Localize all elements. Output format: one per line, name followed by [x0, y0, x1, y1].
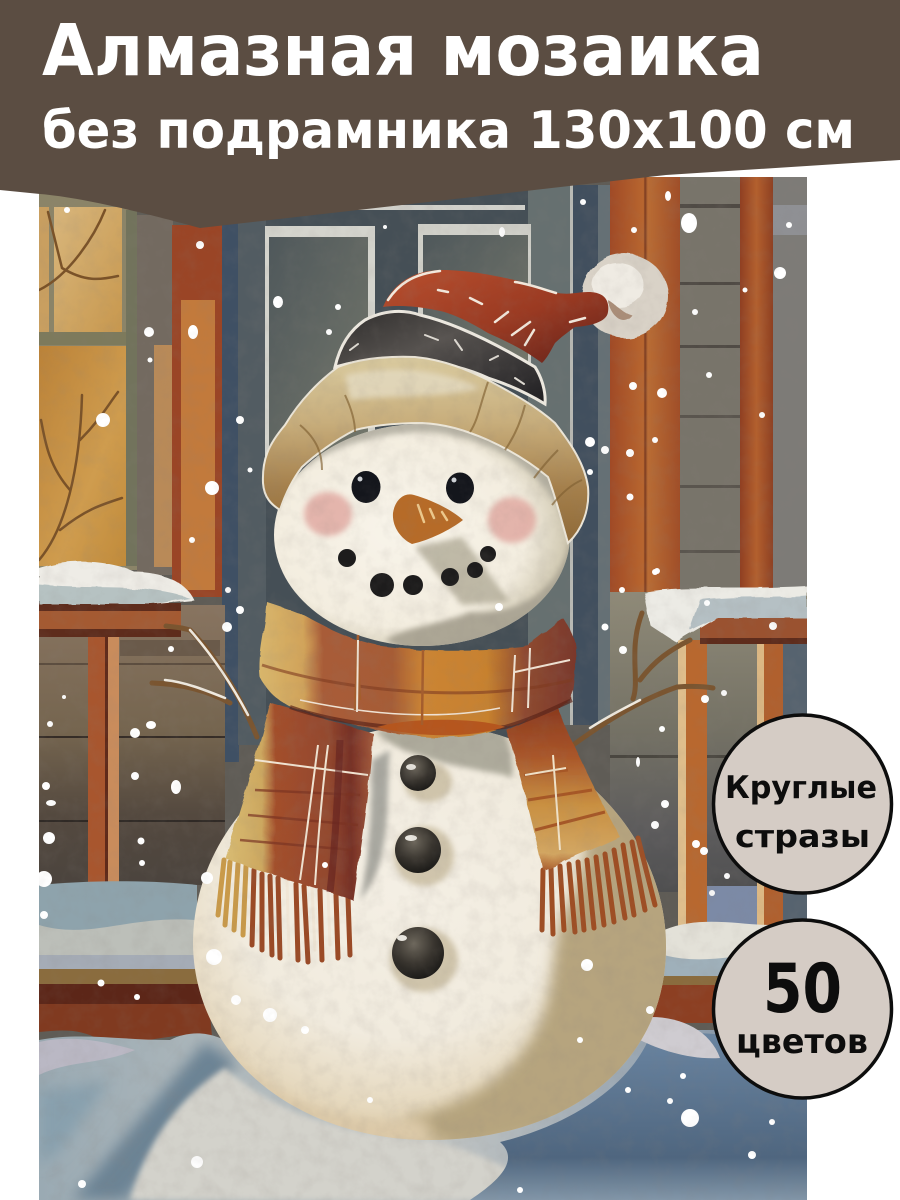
right tail plaid lines	[524, 755, 605, 850]
scarf right tail	[507, 707, 620, 870]
right scarf fringe	[542, 838, 655, 934]
watercolor paper texture	[39, 177, 807, 1200]
title: second line: без подрамника 130х100 см	[42, 101, 855, 161]
left tail plaid lines	[240, 740, 368, 892]
black hat band	[335, 311, 545, 404]
red santa hat	[383, 270, 608, 363]
snowman	[152, 254, 713, 1150]
band speckles	[350, 335, 524, 384]
snowman body	[193, 725, 666, 1140]
eye glints	[358, 476, 456, 482]
scarf left tail	[225, 703, 373, 900]
lower right wall with posts	[610, 592, 807, 930]
body shading	[232, 730, 666, 1140]
badge: round rhinestones	[714, 715, 892, 893]
scarf neck wrap	[259, 602, 576, 737]
buttons	[392, 755, 444, 979]
panel: watercolor snowman painting	[36, 177, 807, 1200]
badge: 50 colours	[714, 920, 892, 1098]
header banner	[0, 0, 900, 228]
background: building wall	[39, 177, 807, 1040]
brim knit marks	[300, 382, 582, 505]
badge: 50 colours: 50	[763, 950, 842, 1029]
neck plaid lines	[262, 635, 572, 735]
carrot nose	[393, 494, 463, 544]
badge: round rhinestones: Круглые	[725, 770, 877, 806]
nose highlights	[418, 505, 447, 522]
hat snow highlights	[388, 271, 585, 345]
bottom rail and drifts	[39, 881, 770, 1043]
button highlights	[397, 764, 417, 941]
smile of coal	[338, 546, 496, 597]
left scarf fringe	[218, 860, 350, 962]
snowman head	[274, 424, 570, 646]
brim light patch	[345, 369, 480, 400]
lower left wall with post	[39, 603, 225, 885]
knitted hat brim	[263, 357, 588, 543]
falling snowflakes	[36, 191, 792, 1193]
tree branches in window	[39, 210, 122, 560]
twig arms	[152, 613, 713, 745]
cheeks	[304, 492, 536, 543]
eyes	[352, 471, 474, 504]
badge: 50 colours: цветов	[736, 1022, 868, 1062]
button halos	[390, 762, 458, 992]
snow on window ledges	[39, 562, 807, 642]
head shading	[290, 424, 569, 646]
snowy ground	[39, 1017, 807, 1200]
badge: round rhinestones: стразы	[735, 819, 870, 855]
title: first line: Алмазная мозаика	[42, 9, 764, 92]
hat pompom	[582, 254, 668, 338]
